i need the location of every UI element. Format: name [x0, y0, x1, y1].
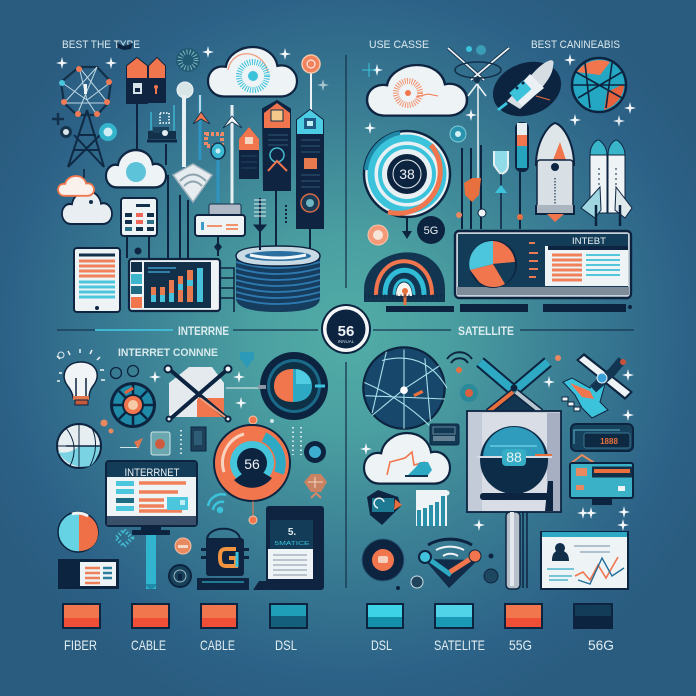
icon: orange dots	[206, 134, 222, 146]
gauge value: 56	[244, 456, 260, 472]
icon: center pylon router	[137, 103, 177, 165]
badge: 5G	[417, 216, 445, 244]
legend label: satellite: SATELITE	[434, 637, 485, 653]
sparkles	[56, 46, 329, 91]
icon: dotted circle	[176, 48, 200, 72]
icon: lightbulb	[57, 349, 105, 405]
icon: small rings	[110, 366, 138, 378]
icon: plus mark	[52, 113, 64, 125]
icon: envelope cross	[164, 366, 262, 422]
sparkles	[362, 54, 636, 134]
legend swatch: 55G	[505, 604, 542, 628]
icon: lock dial	[169, 565, 191, 587]
dotted accents	[181, 427, 301, 455]
gauge value: 38	[399, 166, 415, 182]
icon: arrow white mast	[223, 105, 242, 205]
icon: calculator	[121, 198, 157, 258]
heading: best capabilities: BEST CANINEABIS	[531, 39, 620, 51]
sparkles	[360, 369, 634, 531]
icon: small image tile	[120, 432, 170, 455]
icon: small diamond dots	[116, 530, 132, 546]
icon: small cyan pin	[450, 126, 466, 142]
icon: landscape cloud	[364, 433, 450, 484]
legend swatch: fiber	[63, 604, 100, 628]
icon: top right cloud	[367, 65, 467, 116]
legend label: cable: CABLE	[131, 637, 166, 653]
legend label: 55G: 55G	[509, 637, 532, 653]
icon: pole	[506, 512, 527, 589]
chart: dashboard bars	[129, 259, 234, 312]
legend label: dsl: DSL	[371, 637, 392, 653]
icon: small orb	[460, 384, 478, 402]
icon: report panel	[541, 532, 628, 589]
legend swatch: cable	[132, 604, 169, 628]
sparkles	[100, 371, 274, 434]
icon: bottom panel	[58, 559, 119, 589]
icon: main monitor	[455, 231, 632, 312]
icon: wifi swirl	[208, 494, 226, 512]
icon: right tall banners	[263, 101, 323, 255]
icon: small wifi	[447, 352, 472, 373]
icon: internet monitor	[106, 461, 197, 526]
icon: wireframe globe	[57, 424, 101, 468]
icon: network globe	[363, 347, 447, 429]
icon: flask	[494, 151, 508, 229]
center badge: 56	[338, 323, 354, 340]
icon: small rings	[60, 123, 117, 141]
icon: twin rockets	[581, 140, 632, 226]
heading: satellite: SATELLITE	[458, 324, 514, 338]
icon: aperture ball	[110, 382, 156, 428]
icon: top cloud	[208, 47, 297, 96]
icon: mosaic globe	[572, 58, 626, 112]
icon: document device	[253, 506, 324, 590]
icon: badge tile	[367, 490, 402, 525]
icon: satellite	[555, 353, 633, 418]
icon: orange disc	[362, 539, 404, 581]
document number: 5.	[288, 527, 296, 538]
chart: rising bars	[416, 490, 450, 526]
icon: fishbone antenna	[254, 198, 286, 250]
dividers	[57, 55, 634, 588]
heading: best the type: BEST THE TYPE	[62, 39, 140, 51]
icon: red cloud pair	[58, 169, 112, 224]
icon: small round tags	[396, 554, 498, 590]
icon: twin house tags	[127, 58, 165, 150]
icon: rocket on dark ellipse	[485, 53, 569, 125]
icon: chip	[191, 427, 206, 451]
legend: left swatches	[63, 604, 307, 653]
panel: top left quadrant	[52, 39, 329, 312]
icon: connector stems	[456, 145, 486, 229]
legend swatch: cable	[201, 604, 237, 628]
icon: cyan lollipop	[211, 143, 225, 203]
icon: large gauge 38	[364, 131, 450, 239]
icon: orange stamp	[175, 538, 191, 554]
heading: internet connection: INTERRET CONNNE	[118, 347, 218, 359]
icon: middle cloud	[106, 150, 166, 187]
pie chart	[469, 240, 517, 288]
heading: internet: INTERRNE	[178, 324, 229, 338]
legend label: 56G: 56G	[588, 637, 614, 653]
icon: crossed antenna	[448, 45, 509, 190]
center badge	[321, 304, 371, 354]
legend label: dsl: DSL	[275, 637, 297, 653]
icon: arc signal	[364, 252, 454, 312]
icon: tablet	[74, 248, 120, 312]
icon: home card	[570, 455, 633, 505]
icon: split ball	[58, 512, 98, 552]
legend label: cable: CABLE	[200, 637, 235, 653]
document caption: 5MATICE	[274, 541, 310, 547]
icon: orange gear badge	[368, 225, 388, 245]
icon: hex tag	[304, 474, 327, 498]
icon: orange beacon	[302, 55, 320, 115]
panel: bottom left quadrant	[57, 347, 328, 653]
device value: 1888	[600, 437, 618, 446]
icon: G machine	[197, 529, 249, 590]
icon: monitor stand	[132, 526, 170, 589]
icon: shield tag	[240, 352, 254, 368]
legend swatch: dsl	[270, 604, 307, 628]
legend swatch: 56G	[574, 604, 612, 628]
legend swatch: satellite	[435, 604, 473, 628]
icon: smudge over heading	[117, 43, 133, 50]
legend: right swatches	[367, 604, 614, 653]
panel: bottom right quadrant	[360, 347, 634, 653]
gauge display: 88	[506, 449, 522, 465]
icon: gauge panel	[467, 411, 561, 512]
panel: top right quadrant	[362, 39, 636, 312]
icon: arrow orange	[193, 95, 210, 160]
icon: small orange house tag	[239, 127, 259, 179]
icon: disc	[304, 441, 326, 463]
legend swatch: dsl	[367, 604, 403, 628]
monitor heading: INTEBT	[572, 236, 606, 247]
icon: main rocket	[536, 123, 574, 222]
legend label: fiber: FIBER	[64, 637, 97, 653]
icon: donut gauge 56	[214, 416, 290, 524]
badge value: 5G	[424, 225, 438, 237]
icon: server stack	[236, 246, 320, 312]
icon: wifi arms	[419, 539, 481, 588]
monitor heading: INTERRNET	[124, 467, 180, 479]
icon: half pie gauge	[258, 352, 328, 420]
icon: device readout	[571, 424, 633, 451]
icon: network tower	[59, 66, 112, 167]
icon: wifi shield mast	[168, 82, 212, 258]
icon: modem	[195, 204, 245, 256]
heading: use case: USE CASSE	[369, 39, 429, 51]
icon: crossed blades	[480, 362, 548, 414]
icon: status tag	[430, 424, 459, 445]
icon: test tube	[515, 122, 529, 229]
center badge: INNUAL	[338, 339, 355, 344]
